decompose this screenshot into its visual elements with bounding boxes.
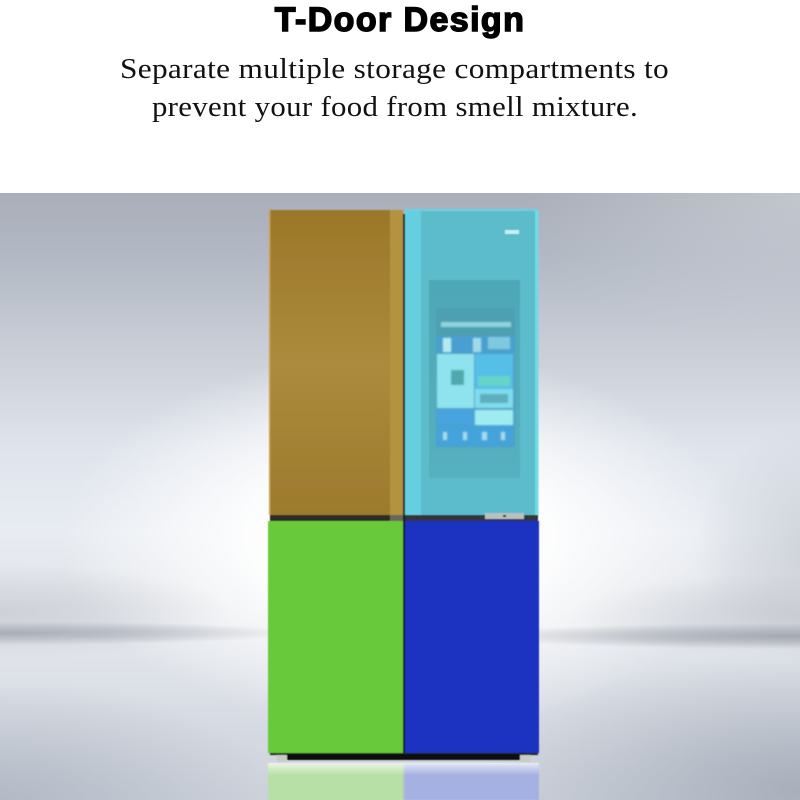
floor reflection — [268, 763, 539, 800]
left tile — [437, 354, 474, 408]
dark divider band — [270, 513, 538, 521]
base and feet — [270, 753, 538, 762]
subtitle text — [120, 53, 669, 123]
touch screen — [436, 308, 515, 447]
gold upper left door — [269, 210, 403, 515]
right tile — [475, 354, 513, 389]
green lower left door — [268, 521, 403, 753]
subtitle text: prevent your food from smell mixture. — [152, 91, 638, 123]
cyan upper right door with screen — [405, 209, 538, 515]
blue lower right door — [405, 521, 539, 753]
refrigerator — [268, 209, 539, 800]
brand mark — [505, 230, 519, 234]
display housing — [429, 280, 520, 478]
product scene — [0, 193, 800, 800]
background — [0, 193, 800, 800]
title: T-Door Design — [275, 1, 525, 39]
door gap — [403, 214, 406, 754]
subtitle text: Separate multiple storage compartments to — [120, 53, 669, 85]
header tile — [437, 336, 514, 353]
status icons — [441, 322, 511, 327]
bottom tiles — [437, 409, 474, 424]
